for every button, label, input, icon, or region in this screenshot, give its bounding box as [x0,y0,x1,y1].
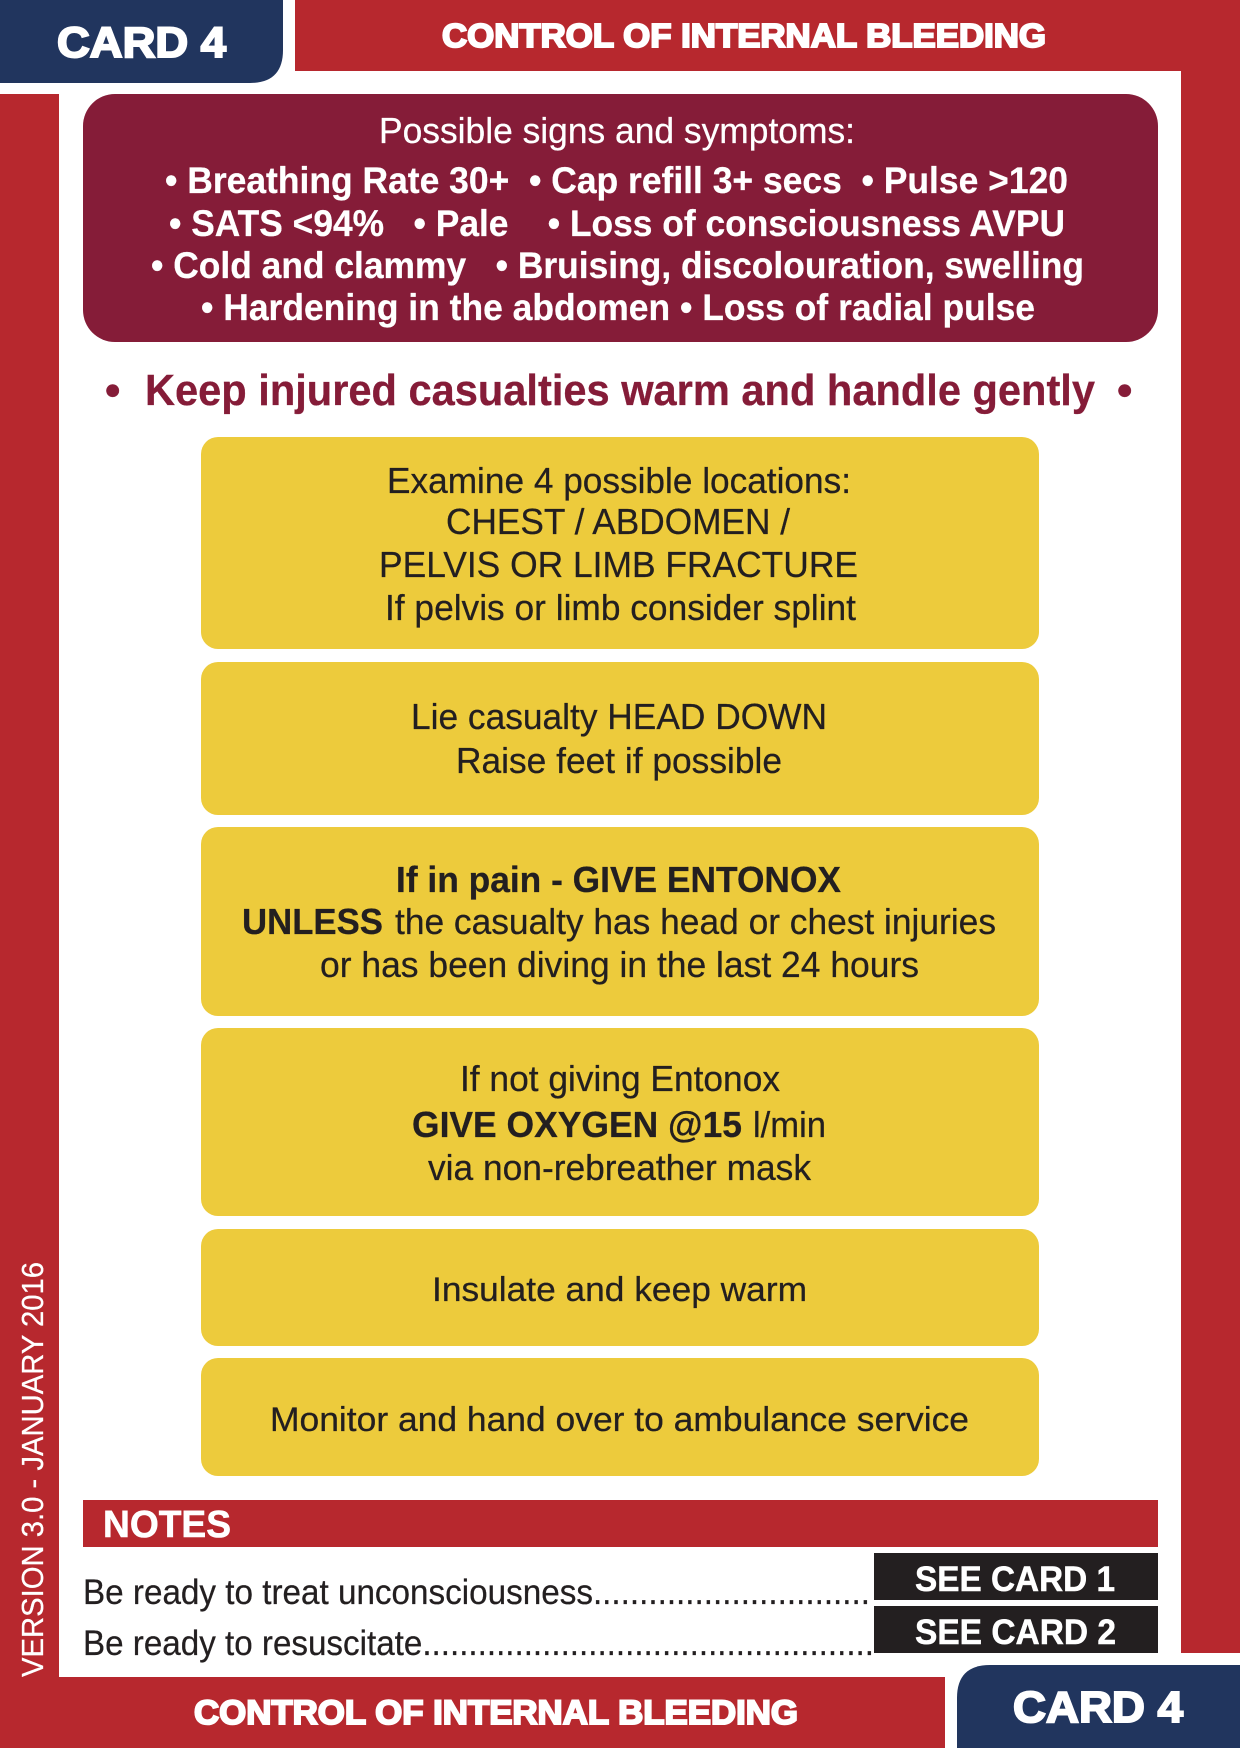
symptom list: • Hardening in the abdomen • Loss of radial pulse [201,287,1035,328]
key instruction heading: Keep injured casualties warm and handle gently [145,366,1096,415]
button: see card 2 [874,1606,1158,1653]
step box: oxygen: via non-rebreather mask [428,1147,812,1188]
step box: examine locations: Examine 4 possible locations: [387,460,851,501]
note: unconsciousness: Be ready to treat unconsciousness.............................. [83,1573,870,1612]
note: resuscitate: Be ready to resuscitate................................................. [83,1624,874,1663]
step box: insulate [201,1229,1039,1346]
symptom list [151,160,1084,328]
step box: head down [201,662,1039,815]
panel heading: Possible signs and symptoms: [379,110,855,151]
panel: possible signs and symptoms [83,94,1158,342]
key instruction heading: • [105,366,120,415]
symptom list: • SATS <94% • Pale • Loss of consciousness AVPU [169,203,1065,244]
step box: oxygen [201,1028,1039,1216]
step box: examine locations: PELVIS OR LIMB FRACTURE [379,544,858,585]
step box: insulate: Insulate and keep warm [432,1271,807,1309]
button: see card 1 [874,1553,1158,1600]
step box: examine locations: CHEST / ABDOMEN / [446,501,790,542]
bottom title: CONTROL OF INTERNAL BLEEDING [194,1694,798,1732]
bottom right tab: card number: CARD 4 [1013,1683,1184,1732]
top left tab: card number: CARD 4 [57,19,226,67]
version label: VERSION 3.0 - JANUARY 2016 [15,1262,50,1677]
notes header bar [83,1500,1158,1547]
key instruction heading: • [1117,366,1132,415]
step box: entonox: UNLESS [242,901,383,942]
notes header bar: NOTES [103,1504,231,1546]
step box: oxygen: GIVE OXYGEN @15 [412,1104,742,1145]
button: see card 2: SEE CARD 2 [915,1613,1116,1652]
bottom right tab: card number [957,1665,1240,1748]
step box: head down: Raise feet if possible [456,740,782,781]
top title: CONTROL OF INTERNAL BLEEDING [442,17,1046,54]
symptom list: • Breathing Rate 30+ • Cap refill 3+ secs • Pulse >120 [165,160,1068,201]
step box: monitor [201,1358,1039,1476]
symptom list: • Cold and clammy • Bruising, discolouration, swelling [151,245,1084,286]
step box: examine locations [201,437,1039,649]
step box: entonox: If in pain - GIVE ENTONOX [396,859,841,900]
step box: monitor: Monitor and hand over to ambulance service [270,1401,969,1439]
step box: entonox [201,827,1039,1016]
button: see card 1: SEE CARD 1 [915,1560,1115,1599]
top left tab: card number [0,0,283,83]
step box: head down: Lie casualty HEAD DOWN [411,696,827,737]
step box: entonox: or has been diving in the last 24 hours [320,944,919,985]
step box: examine locations: If pelvis or limb consider splint [385,587,856,628]
step box: entonox: the casualty has head or chest injuries [395,901,996,942]
step box: oxygen: If not giving Entonox [460,1058,780,1099]
step box: oxygen: l/min [753,1104,826,1145]
